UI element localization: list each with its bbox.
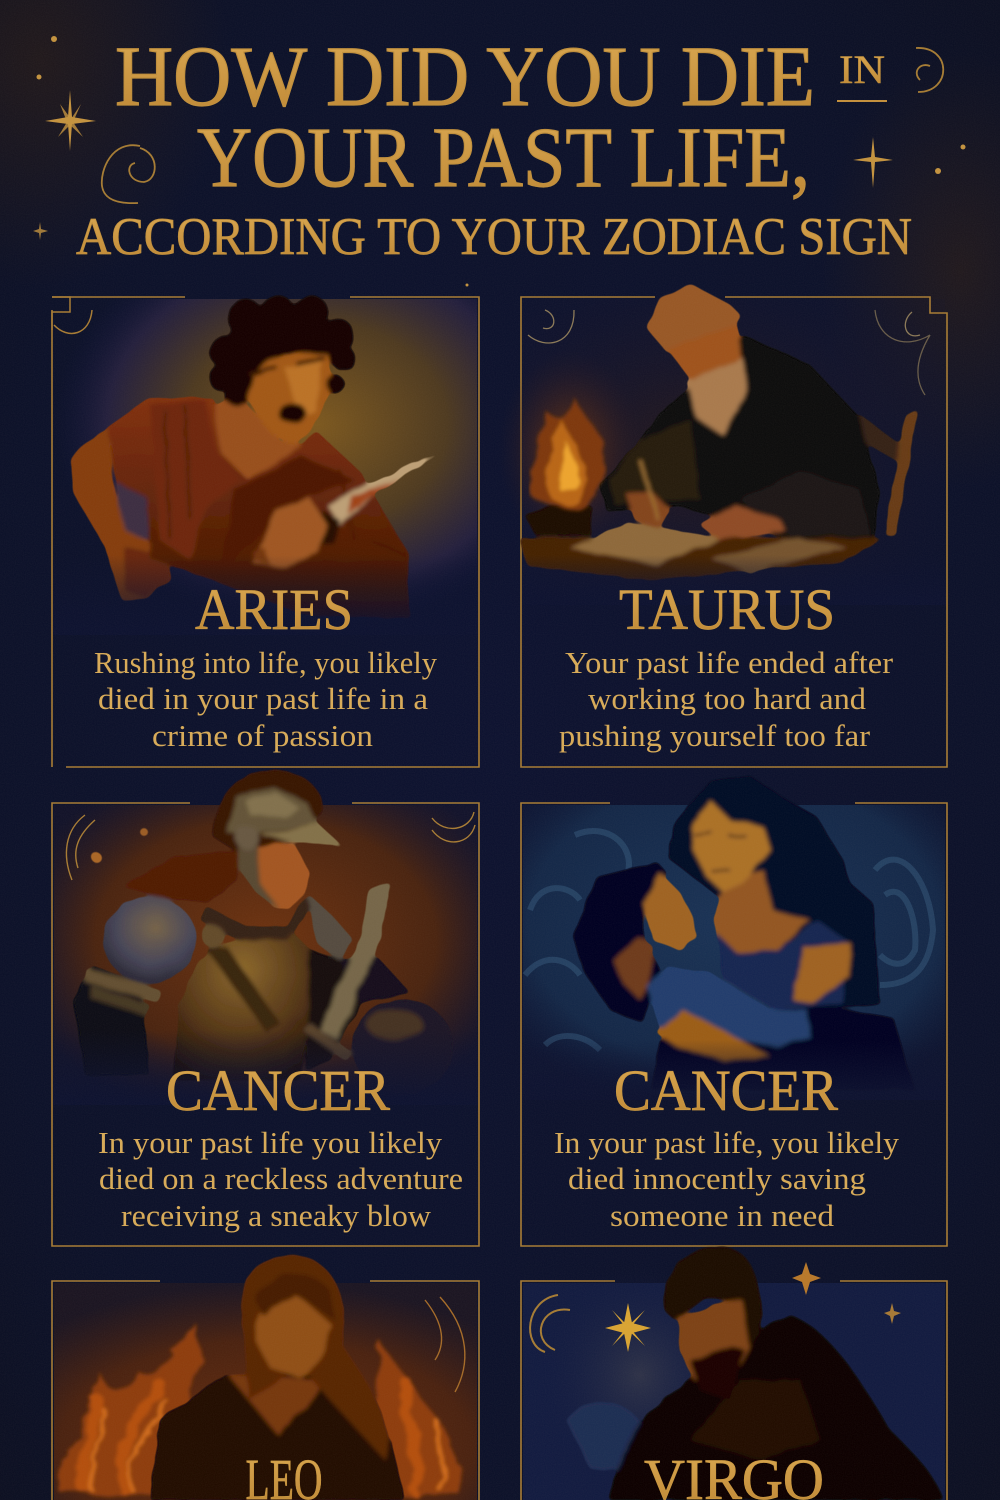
- fade: cancer mother: [522, 1040, 946, 1100]
- text: cancer mother: In your past life, you likely: [554, 1125, 899, 1160]
- fade: aries: [53, 555, 478, 635]
- star: large: [605, 1303, 651, 1352]
- title: YOUR PAST LIFE,: [197, 109, 810, 205]
- backdrop: cancer warrior: [54, 805, 477, 1105]
- star: top: [792, 1262, 821, 1295]
- text: cancer mother: died innocently saving: [568, 1161, 866, 1196]
- painting: cancer warrior with sword: [73, 770, 453, 1094]
- corner ornament: aries: [52, 297, 92, 333]
- panel: cancer mother and child: [521, 775, 947, 1246]
- panel: aries: [52, 295, 479, 767]
- fire: taurus: [532, 395, 604, 508]
- title: HOW DID YOU DIE: [115, 28, 815, 124]
- heading: cancer warrior: CANCER: [166, 1058, 390, 1123]
- painting: virgo cloaked man: [530, 1246, 944, 1500]
- text: taurus: working too hard and: [588, 681, 867, 716]
- text: cancer warrior: [98, 1125, 463, 1233]
- painting: taurus scribe at desk: [520, 285, 918, 580]
- text: taurus: [559, 645, 894, 753]
- frame: virgo: [521, 1281, 947, 1500]
- panel: cancer warrior: [52, 770, 479, 1246]
- text: cancer warrior: In your past life you likely: [98, 1125, 443, 1160]
- corner ornament: leo: [425, 1297, 465, 1392]
- panel: virgo: [521, 1246, 947, 1500]
- heading: aries: ARIES: [195, 577, 353, 642]
- text: aries: died in your past life in a: [98, 681, 428, 716]
- text: aries: [94, 645, 437, 753]
- title: small IN with underline: IN: [839, 47, 885, 92]
- star: small: [884, 1303, 901, 1324]
- frame: taurus: [521, 297, 947, 767]
- fade: cancer warrior: [53, 1030, 478, 1105]
- backdrop: cancer mother: [523, 805, 945, 1100]
- heading: taurus: TAURUS: [619, 577, 835, 642]
- frame: cancer mother: [521, 803, 947, 1246]
- title: [76, 28, 912, 266]
- text: cancer mother: someone in need: [610, 1198, 835, 1233]
- backdrop: taurus: [523, 299, 945, 604]
- backdrop: leo: [54, 1283, 477, 1500]
- backdrop: aries: [54, 299, 477, 629]
- frame: aries: [52, 297, 479, 767]
- text: cancer mother: [554, 1125, 899, 1233]
- glow: taurus fire: [498, 350, 642, 550]
- decorative stars and swirls: [33, 36, 966, 286]
- corner ornaments: taurus: [528, 310, 930, 395]
- text: cancer warrior: died on a reckless adventure: [99, 1161, 463, 1196]
- text: aries: crime of passion: [152, 718, 374, 753]
- flames: leo: [61, 1322, 460, 1495]
- text: taurus: Your past life ended after: [565, 645, 894, 680]
- painting: leo figure: [150, 1255, 405, 1500]
- moon ornament: virgo: [530, 1295, 570, 1352]
- title: small IN with underline: [837, 47, 887, 102]
- title: ACCORDING TO YOUR ZODIAC SIGN: [76, 208, 912, 266]
- heading: cancer mother: CANCER: [614, 1058, 838, 1123]
- text: taurus: pushing yourself too far: [559, 718, 871, 753]
- backdrop: virgo: [523, 1283, 945, 1500]
- text: aries: Rushing into life, you likely: [94, 645, 437, 680]
- fade: taurus: [522, 555, 946, 605]
- painting: aries youth with dagger: [70, 295, 446, 618]
- text: cancer warrior: receiving a sneaky blow: [121, 1198, 432, 1233]
- frame: cancer warrior: [52, 803, 479, 1246]
- panel: leo: [52, 1255, 479, 1500]
- swirls: cancer mother: [525, 831, 933, 1050]
- corner ornament: cancer warrior: [66, 812, 475, 880]
- frame: leo: [52, 1281, 479, 1500]
- panel: taurus: [498, 285, 947, 767]
- painting: cancer woman cradling a child: [573, 775, 915, 1090]
